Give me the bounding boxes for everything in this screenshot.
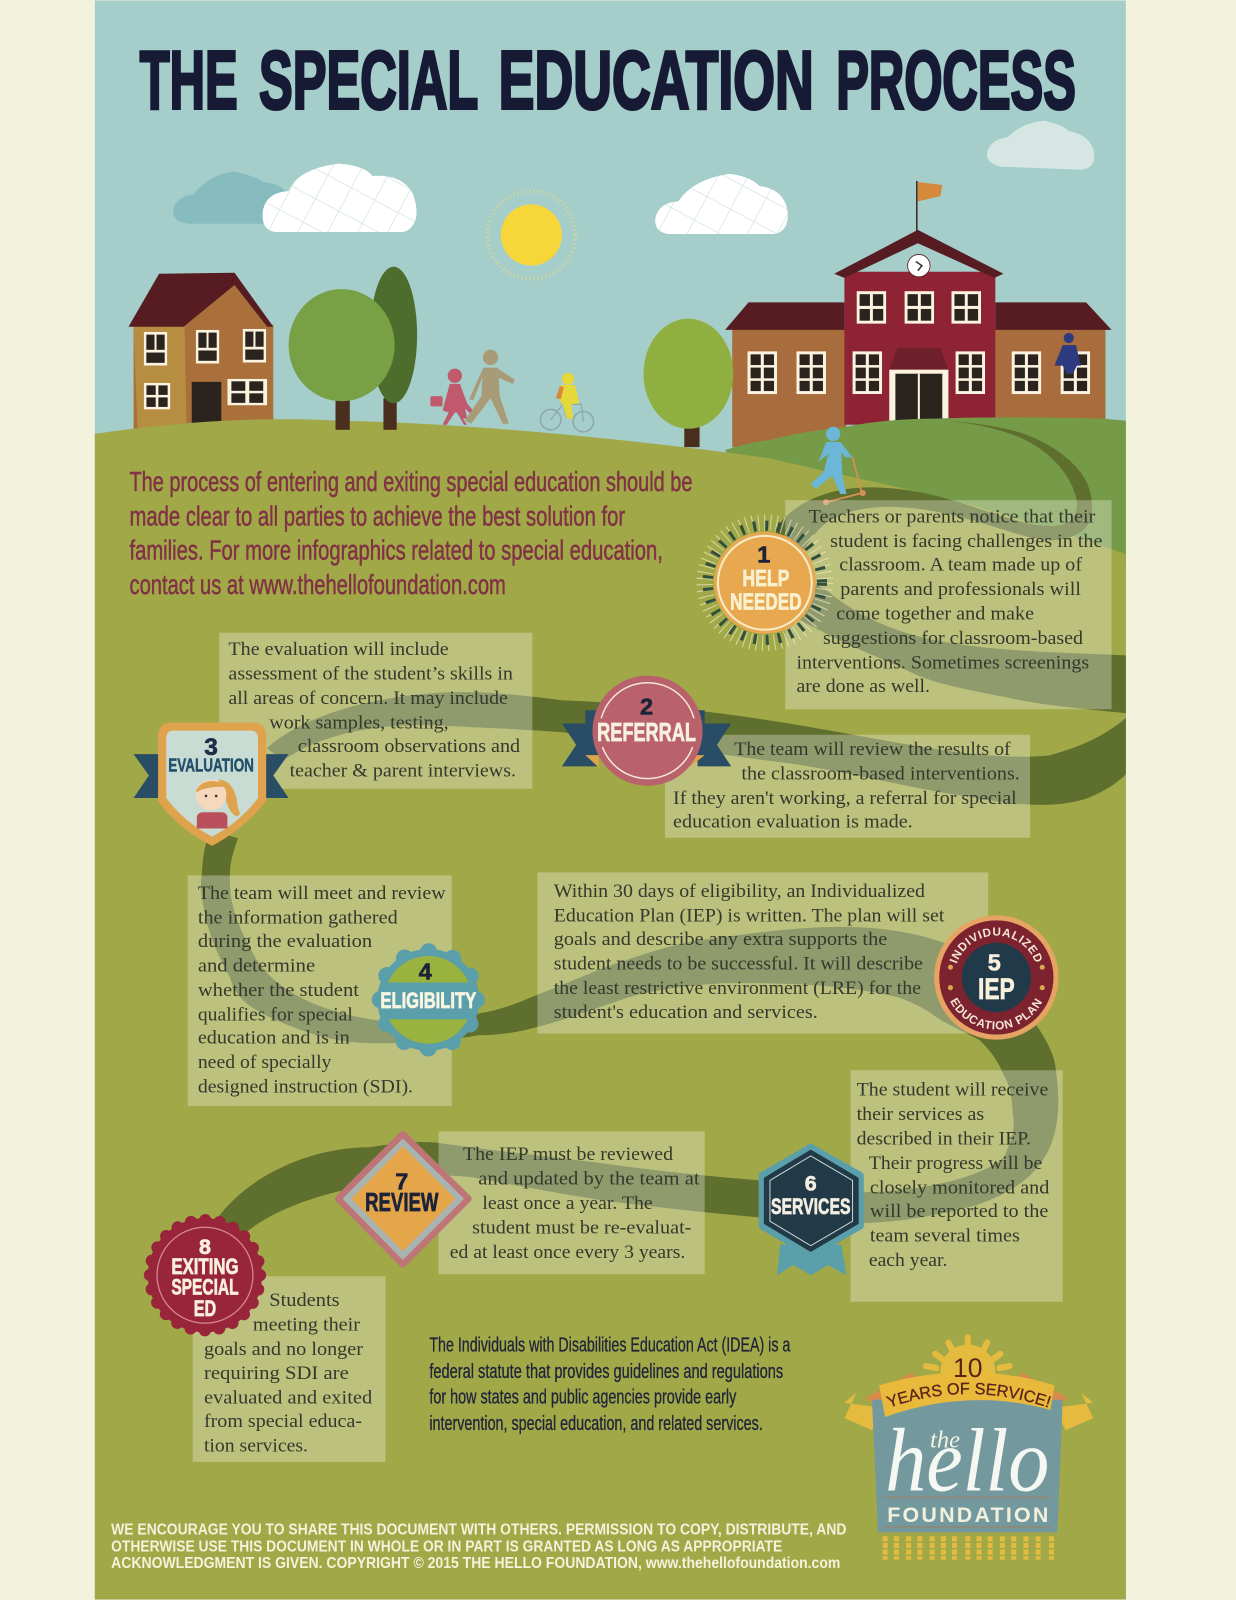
illustration: figure on school wall [1054,333,1081,374]
logo: hello foundation: the [930,1427,960,1454]
text box: step 8 [193,1276,385,1462]
illustration: child on bicycle [540,373,594,432]
text box: step 8: evaluated and exited [204,1388,373,1409]
text box: step 3: classroom observations and [298,736,521,757]
title: EDUCATION [499,34,814,127]
text box: step 7: least once a year. The [482,1193,653,1214]
text box: step 3: teacher & parent interviews. [290,761,516,782]
illustration: parent and child walking [430,350,515,425]
text box: step 1: classroom. A team made up of [839,555,1083,576]
text box: step 3: work samples, testing, [269,713,449,734]
text box: step 7: and updated by the team at [478,1168,700,1189]
intro text: made clear to all parties to achieve the best solution for [130,501,625,532]
text box: step 6: The student will receive [857,1080,1048,1101]
footer permission notice: WE ENCOURAGE YOU TO SHARE THIS DOCUMENT WITH OTHERS. PERMISSION TO COPY, DISTRIBUTE, AND [111,1521,846,1538]
text box: step 5: student needs to be successful. It will describe [554,953,923,974]
illustration: blue child with scooter [811,427,866,505]
title: PROCESS [836,34,1076,127]
logo: hello foundation: FOUNDATION [887,1503,1048,1527]
badge 1: help needed: NEEDED [730,588,802,614]
cloud: pale top right [987,121,1094,170]
text box: step 4: qualifies for special [198,1004,353,1025]
badge 8: exiting special ed: SPECIAL [171,1275,239,1300]
text box: step 7: The IEP must be reviewed [463,1144,674,1165]
text box: step 1: parents and professionals will [840,579,1081,600]
text box: step 4: education and is in [198,1028,350,1049]
footer permission notice: ACKNOWLEDGMENT IS GIVEN. COPYRIGHT © 2015 THE HELLO FOUNDATION, www.thehellofoundation.com [111,1555,840,1572]
illustration: tree right [643,319,733,447]
title [140,34,1076,127]
text box: step 1: student is facing challenges in the [830,531,1102,552]
intro text [130,466,692,600]
badge 1: help needed [705,523,825,643]
text box: step 8: requiring SDI are [204,1363,349,1384]
text box: step 8: goals and no longer [204,1339,364,1360]
text box: step 4: the information gathered [198,907,398,928]
title: SPECIAL [259,34,478,127]
badge 8: exiting special ed: 8 [199,1235,211,1259]
text box: step 5: the least restrictive environment (LRE) for the [554,978,921,999]
text box: step 5: goals and describe any extra supports the [554,929,887,950]
text box: step 1: are done as well. [796,676,930,697]
text box: step 6: each year. [869,1250,947,1271]
text box: step 4: The team will meet and review [198,883,446,904]
text box: step 6: will be reported to the [870,1201,1048,1222]
text box: step 7: ed at least once every 3 years. [450,1242,685,1263]
text box: step 1: come together and make [836,603,1034,624]
badge 2: referral: REFERRAL [597,719,696,747]
text box: step 6: Their progress will be [869,1153,1042,1174]
badge 2: referral: 2 [640,693,653,719]
badge 8: exiting special ed [148,1218,262,1332]
text box: step 5 [537,872,988,1034]
badge 4: eligibility: ELIGIBILITY [380,988,476,1013]
badge 7: review: 7 [395,1169,408,1195]
badge 5: IEP: IEP [978,973,1015,1006]
badge 4: eligibility [377,949,479,1051]
cloud: white left [263,164,417,232]
text box: step 8: meeting their [253,1314,361,1335]
illustration: trees left [289,267,417,430]
badge 8: exiting special ed: EXITING [171,1254,239,1279]
text box: step 1: suggestions for classroom-based [823,628,1084,649]
logo: hello foundation: hello [885,1411,1049,1510]
IDEA note: intervention, special education, and related services. [429,1413,763,1435]
text box: step 6: closely monitored and [870,1178,1050,1199]
text box: step 4: need of specially [198,1052,332,1073]
IDEA note: The Individuals with Disabilities Education Act (IDEA) is a [429,1335,791,1357]
footer permission notice [111,1521,846,1572]
text box: step 3: all areas of concern. It may include [228,688,508,709]
winding path [201,420,1127,1233]
text box: step 4: whether the student [198,980,360,1001]
text box: step 2 [665,735,1030,838]
logo: hello foundation [844,1334,1094,1560]
text box: step 6 [851,1070,1063,1302]
badge 3: evaluation [134,722,289,846]
text box: step 4: and determine [198,955,315,976]
badge 4: eligibility: 4 [419,958,432,984]
badge 6: services: 6 [805,1172,817,1196]
text box: step 6: described in their IEP. [857,1129,1031,1150]
badge 5: IEP: 5 [988,949,1001,975]
text box: step 4: during the evaluation [198,931,373,952]
badge 6: services: SERVICES [771,1194,851,1219]
badge 5: IEP [934,915,1058,1040]
text box: step 4 [188,875,452,1106]
IDEA note: federal statute that provides guidelines and regulations [429,1361,783,1383]
badge 5: IEP: EDUCATION PLAN [950,998,1042,1030]
hill: main ground [95,419,1126,1600]
text box: step 5: student's education and services. [554,1002,818,1023]
intro text: families. For more infographics related to special education, [130,534,663,565]
badge 5: IEP: INDIVIDUALIZED [949,928,1042,964]
text box: step 3: assessment of the student’s skills in [228,664,514,685]
text box: step 2: the classroom-based interventions. [741,764,1020,785]
text box: step 8: from special educa- [204,1411,362,1432]
badge 8: exiting special ed: ED [194,1296,216,1321]
text box: step 4: designed instruction (SDI). [198,1077,413,1098]
text box: step 8: Students [269,1290,340,1311]
icon: sun [487,191,575,279]
text box: step 1: interventions. Sometimes screenings [796,652,1089,673]
intro text: The process of entering and exiting special education should be [130,466,692,497]
text box: step 7: student must be re-evaluat- [472,1217,691,1238]
text box: step 1 [785,500,1112,709]
badge 7: review: REVIEW [365,1189,439,1217]
IDEA note: for how states and public agencies provide early [429,1387,737,1409]
logo: hello foundation: YEARS OF SERVICE! [886,1382,1051,1408]
text box: step 6: their services as [857,1104,984,1125]
text box: step 1: Teachers or parents notice that their [809,507,1096,528]
logo: hello foundation: 10 [953,1353,983,1383]
illustration: school [725,181,1112,447]
text box: step 3 [219,633,532,789]
badge 3: evaluation: 3 [204,734,218,761]
badge 6: services [762,1147,861,1275]
footer permission notice: OTHERWISE USE THIS DOCUMENT IN WHOLE OR IN PART IS GRANTED AS LONG AS APPROPRIATE [111,1539,782,1556]
text box: step 2: If they aren't working, a referral for special [673,788,1017,809]
hill: right [725,417,1126,572]
text box: step 6: team several times [870,1226,1020,1247]
text box: step 5: Education Plan (IEP) is written. The plan will set [554,905,945,926]
title: THE [140,34,238,127]
badge 7: review [339,1134,468,1264]
badge 3: evaluation: EVALUATION [168,754,254,775]
text box: step 3: The evaluation will include [228,639,449,660]
cloud: white centre [655,174,788,234]
IDEA note [429,1335,791,1435]
cloud: teal left [173,172,291,224]
illustration: house [128,273,273,433]
intro text: contact us at www.thehellofoundation.com [130,569,506,600]
text box: step 2: The team will review the results of [734,739,1011,760]
badge 1: help needed: HELP [742,565,789,591]
text box: step 7 [439,1131,705,1274]
badge 2: referral [562,676,731,786]
text box: step 5: Within 30 days of eligibility, an Individualized [554,881,926,902]
text box: step 2: education evaluation is made. [673,812,913,833]
text box: step 8: tion services. [204,1436,308,1457]
badge 1: help needed: 1 [757,541,770,567]
